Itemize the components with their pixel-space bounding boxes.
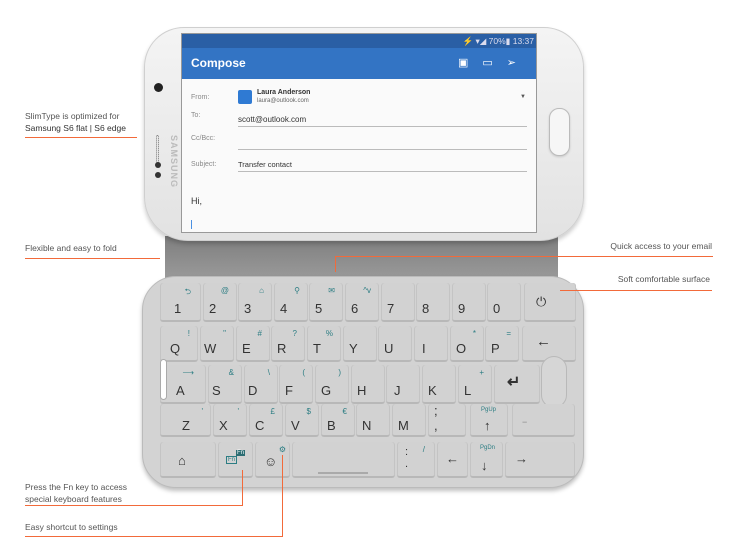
row 4 — [160, 404, 211, 437]
keyboard body — [142, 276, 584, 488]
keys: F — [285, 383, 293, 398]
keys: . — [405, 458, 408, 470]
row 3: ⟶ — [183, 368, 194, 377]
keys: V — [291, 418, 300, 433]
screen: laura@outlook.com — [257, 98, 309, 104]
screen: scott@outlook.com — [238, 115, 306, 124]
label: Fn: Press the Fn key to access — [25, 482, 127, 492]
hinge — [165, 236, 558, 282]
keys: G — [321, 383, 331, 398]
label: soft surface: Soft comfortable surface — [618, 274, 710, 284]
keys: % — [326, 329, 333, 338]
keys: 7 — [387, 301, 394, 316]
keys: * — [473, 329, 476, 338]
keys: N — [362, 418, 371, 433]
brand: SAMSUNG — [169, 135, 179, 188]
keys: 3 — [244, 301, 251, 316]
app bar: Compose — [191, 56, 246, 70]
app bar: ▣▭➢ — [458, 57, 530, 69]
arrow: soft surface — [560, 290, 712, 291]
phone — [144, 27, 584, 241]
row 2: Q — [170, 341, 180, 356]
keys: O — [456, 341, 466, 356]
keys: = — [506, 329, 511, 338]
keys: 4 — [280, 301, 287, 316]
keys: S — [212, 383, 221, 398]
arrow: flexible — [25, 258, 160, 259]
keys: X — [219, 418, 228, 433]
keys: + — [479, 368, 484, 377]
keys: ↑ — [484, 418, 490, 433]
keys: " — [223, 329, 226, 338]
keys: ↵ — [507, 374, 520, 391]
form: From: — [191, 94, 209, 101]
row 5 — [160, 442, 216, 478]
row 1: 1 — [174, 301, 181, 316]
keys: L — [464, 383, 471, 398]
keys: ← — [446, 451, 459, 466]
keys: R — [277, 341, 286, 356]
keys: ^v — [363, 286, 371, 295]
screen: Transfer contact — [238, 160, 292, 169]
keys: ↓ — [481, 458, 488, 473]
label: quick access: Quick access to your email — [610, 241, 712, 251]
arrow: quick access — [335, 256, 713, 272]
arrow: Fn — [25, 470, 243, 506]
keys: 0 — [493, 301, 500, 316]
row 1 — [160, 283, 201, 322]
camera — [154, 83, 163, 92]
label: Fn: special keyboard features — [25, 494, 122, 504]
keys: ✉ — [328, 286, 335, 295]
screen: Hi, — [191, 196, 202, 206]
keys: € — [343, 407, 347, 416]
row 2: ! — [188, 329, 190, 338]
Fn key: Fn — [228, 457, 235, 463]
keys: £ — [271, 407, 275, 416]
arrow: SlimType — [25, 137, 137, 138]
keys: 6 — [351, 301, 358, 316]
keys: → — [515, 451, 528, 466]
keys: 2 — [209, 301, 216, 316]
keys: PgDn — [480, 445, 495, 451]
label: SlimType: Samsung S6 flat | S6 edge — [25, 123, 126, 133]
keys: : — [405, 446, 408, 458]
label: flexible: Flexible and easy to fold — [25, 243, 117, 253]
status bar: ⚡ ▾◢ 70%▮ 13:37 — [463, 36, 534, 46]
keys: ) — [338, 368, 341, 377]
keys: ⏻ — [536, 294, 546, 309]
keys: 9 — [458, 301, 465, 316]
keys: E — [242, 341, 251, 356]
keys: K — [428, 383, 437, 398]
keys: B — [327, 418, 336, 433]
keys: ⚲ — [294, 286, 300, 295]
keys: U — [384, 341, 393, 356]
keys: ? — [293, 329, 297, 338]
keys: ' — [237, 407, 239, 416]
row 1: ⮌ — [185, 287, 191, 296]
app bar — [182, 48, 538, 79]
keys: C — [255, 418, 264, 433]
status bar — [182, 34, 538, 48]
row 5: ⌂ — [178, 453, 186, 468]
emoji key with settings — [255, 442, 290, 478]
keys: ← — [536, 333, 551, 350]
keys: ⌂ — [259, 286, 264, 295]
keys: @ — [221, 286, 229, 295]
keys: D — [248, 383, 257, 398]
keys: $ — [307, 407, 311, 416]
keys: − — [522, 417, 527, 427]
keys: \ — [268, 368, 270, 377]
keys: # — [258, 329, 262, 338]
keys: / — [423, 445, 425, 454]
keys: J — [394, 383, 400, 398]
keys: ( — [302, 368, 305, 377]
row 3: A — [176, 383, 185, 398]
keys: ; — [434, 403, 438, 418]
label: SlimType: SlimType is optimized for — [25, 111, 119, 121]
row 4: Z — [182, 418, 190, 433]
screen: Laura Anderson — [257, 89, 310, 96]
emoji key with settings: ⚙ — [279, 445, 286, 454]
screen: Cc/Bcc: — [191, 135, 215, 142]
row 3 — [160, 365, 206, 404]
keys: P — [491, 341, 500, 356]
keys: H — [357, 383, 366, 398]
row 4: ' — [201, 407, 203, 416]
keys: 8 — [422, 301, 429, 316]
keys: & — [229, 368, 234, 377]
side oval & slot — [541, 356, 567, 408]
label: settings: Easy shortcut to settings — [25, 522, 118, 532]
screen: To: — [191, 112, 200, 119]
label: SlimType — [25, 111, 126, 133]
keys: Y — [349, 341, 358, 356]
row 2 — [160, 326, 198, 362]
screen — [181, 33, 537, 233]
Fn key: Fn — [237, 450, 244, 456]
emoji key with settings: ☺ — [264, 454, 277, 469]
keys: T — [313, 341, 321, 356]
arrow: settings — [25, 455, 283, 537]
keys: 5 — [315, 301, 322, 316]
keys: PgUp — [481, 407, 496, 413]
home button — [549, 108, 570, 156]
screen: Subject: — [191, 161, 216, 168]
keys: I — [422, 341, 426, 356]
label: Fn — [25, 482, 127, 504]
Fn key — [218, 442, 253, 478]
keys: M — [398, 418, 409, 433]
keys: , — [434, 418, 438, 433]
screen: ▼ — [520, 94, 526, 100]
keys: W — [204, 341, 216, 356]
